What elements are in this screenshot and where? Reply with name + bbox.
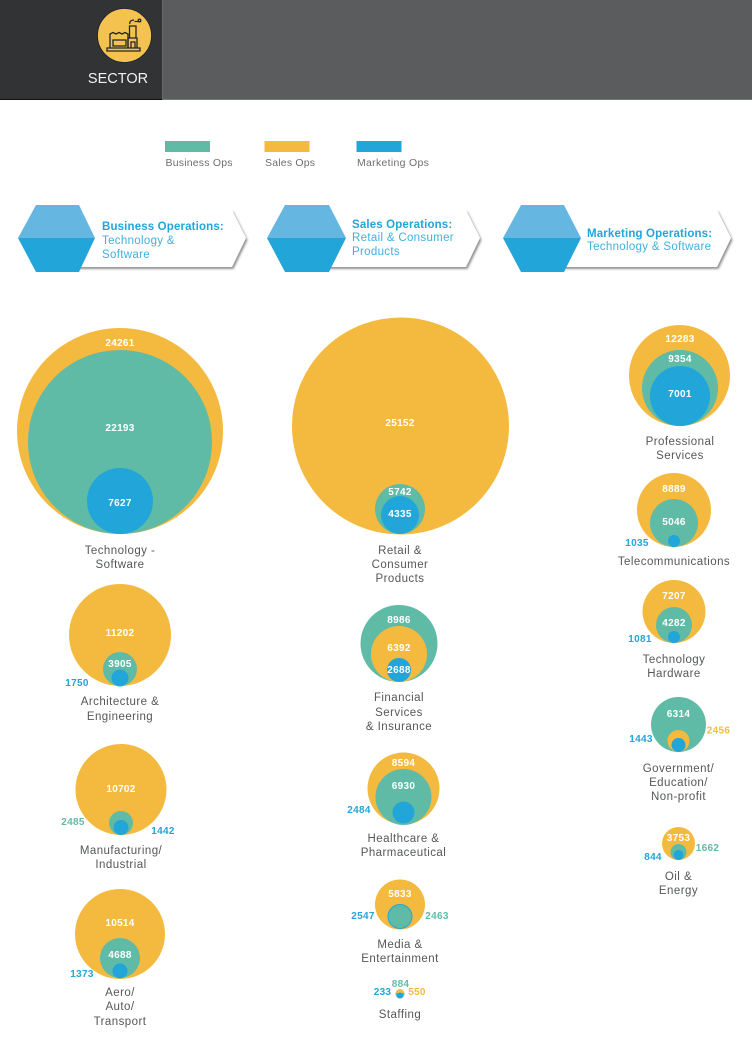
bubble: retail and consumer products [292, 318, 509, 585]
bubble: manufacturing industrial: 1442 [151, 826, 175, 837]
bubble: retail and consumer products: Retail & [378, 545, 422, 557]
banner: business operations [18, 205, 246, 272]
bubble: technology software: Software [96, 559, 144, 571]
banner: sales operations: Retail & Consumer [352, 232, 454, 244]
bubble: government education non-profit: 1443 [629, 734, 653, 745]
bubble: government education non-profit: Education/ [649, 777, 708, 789]
bubble: oil and energy: 844 [644, 852, 662, 863]
legend [165, 141, 429, 169]
bubble: professional services: 7001 [668, 389, 692, 400]
bubble: financial services and insurance: 8986 [387, 615, 411, 626]
bubble: technology software: 22193 [105, 423, 135, 434]
bubble: technology software: Technology - [85, 545, 155, 557]
bubble: aero auto transport: Aero/ [105, 987, 135, 999]
bubble: professional services: 12283 [665, 334, 695, 345]
bubble: telecommunications: Telecommunications [618, 556, 730, 568]
bubble: manufacturing industrial: 10702 [106, 784, 136, 795]
bubble: oil and energy: 3753 [667, 833, 690, 844]
banner: sales operations [267, 205, 480, 272]
bubble: healthcare and pharmaceutical: 8594 [392, 758, 415, 769]
bubble: telecommunications: 1035 [625, 538, 649, 549]
header bar [0, 0, 752, 100]
bubble: financial services and insurance: 2688 [387, 665, 411, 676]
bubble: aero auto transport: 10514 [105, 918, 135, 929]
sector label: SECTOR [88, 71, 148, 87]
bubble: architecture and engineering [65, 584, 171, 723]
bubble: government education non-profit: Non-profit [651, 791, 706, 803]
bubble: telecommunications: 5046 [662, 517, 686, 528]
banner: business operations: Business Operations: [102, 221, 224, 233]
bubble: technology hardware: 1081 [628, 634, 652, 645]
bubble: staffing: 550 [408, 987, 426, 998]
bubble: financial services and insurance: Financial [374, 692, 424, 704]
banner: marketing operations: Marketing Operations: [587, 228, 712, 240]
banner: sales operations: Products [352, 246, 400, 258]
bubble: architecture and engineering: 11202 [106, 628, 135, 639]
bubble: retail and consumer products: 25152 [385, 418, 415, 429]
bubble: technology software [17, 328, 223, 571]
bubble: media and entertainment: 2463 [425, 911, 449, 922]
bubble: government education non-profit: Government/ [643, 763, 715, 775]
bubble: architecture and engineering: 1750 [65, 678, 89, 689]
bubble: financial services and insurance: 6392 [387, 643, 411, 654]
bubble: staffing: 233 [374, 987, 391, 998]
bubble: retail and consumer products: Products [376, 573, 424, 585]
bubble: professional services: Professional [646, 436, 714, 448]
bubble: financial services and insurance: & Insurance [366, 721, 432, 733]
bubble: telecommunications [618, 473, 730, 568]
bubble: media and entertainment [351, 880, 449, 965]
bubble: media and entertainment: 5833 [388, 889, 412, 900]
bubble: manufacturing industrial: Manufacturing/ [80, 845, 163, 857]
bubble: manufacturing industrial: Industrial [95, 859, 147, 871]
bubble: technology hardware: Technology [643, 654, 705, 666]
bubble: oil and energy: 1662 [696, 843, 719, 854]
bubble: oil and energy: Oil & [665, 871, 692, 883]
bubble: technology software: 7627 [108, 498, 132, 509]
bubble: retail and consumer products: 4335 [388, 509, 412, 520]
bubble: professional services: 9354 [668, 354, 692, 365]
bubble: financial services and insurance [360, 605, 438, 733]
bubble: staffing [374, 979, 426, 1021]
legend: Business Ops [166, 157, 233, 169]
bubble: government education non-profit: 2456 [707, 726, 730, 736]
bubble: aero auto transport: 4688 [108, 950, 132, 961]
bubble: retail and consumer products: Consumer [372, 559, 428, 571]
banner: marketing operations [503, 205, 731, 272]
banner: marketing operations: Technology & Software [587, 241, 711, 253]
bubble: retail and consumer products: 5742 [388, 487, 412, 498]
banner: business operations: Technology & [102, 235, 175, 247]
bubble: manufacturing industrial: 2485 [61, 817, 85, 828]
bubble: healthcare and pharmaceutical: 6930 [392, 781, 415, 792]
bubble: aero auto transport: 1373 [70, 969, 94, 980]
banner: sales operations: Sales Operations: [352, 219, 452, 231]
bubble: oil and energy [644, 827, 719, 897]
bubble: healthcare and pharmaceutical [347, 752, 446, 859]
bubble: aero auto transport: Transport [94, 1016, 147, 1028]
bubble: media and entertainment: Entertainment [361, 953, 439, 965]
legend: Sales Ops [265, 157, 315, 169]
bubble: aero auto transport: Auto/ [105, 1001, 135, 1013]
bubble: government education non-profit: 6314 [667, 709, 690, 720]
bubble: technology hardware [628, 580, 706, 680]
bubble: technology software: 24261 [105, 338, 135, 349]
bubble: architecture and engineering: Architecture & [81, 696, 159, 708]
bubble: healthcare and pharmaceutical: Healthcare & [368, 833, 439, 845]
bubble: government education non-profit [629, 697, 730, 803]
bubble: technology hardware: 4282 [662, 618, 686, 629]
banner: business operations: Software [102, 249, 150, 261]
bubble: aero auto transport [70, 889, 165, 1028]
bubble: architecture and engineering: 3905 [108, 659, 132, 670]
bubble: oil and energy: Energy [659, 885, 698, 897]
bubble: healthcare and pharmaceutical: Pharmaceutical [361, 847, 446, 859]
bubble: healthcare and pharmaceutical: 2484 [347, 805, 371, 816]
bubble: professional services: Services [656, 450, 704, 462]
bubble: staffing: Staffing [379, 1009, 421, 1021]
icon: factory [98, 8, 152, 62]
bubble: technology hardware: 7207 [662, 591, 686, 602]
legend: Marketing Ops [357, 157, 429, 169]
bubble: technology hardware: Hardware [647, 668, 701, 680]
bubble: financial services and insurance: Services [375, 707, 423, 719]
bubble: professional services [629, 325, 730, 462]
bubble: telecommunications: 8889 [662, 484, 686, 495]
bubble: media and entertainment: Media & [377, 939, 423, 951]
bubble: staffing: 884 [392, 979, 409, 990]
bubble: manufacturing industrial [61, 744, 175, 871]
bubble: architecture and engineering: Engineering [87, 711, 153, 723]
bubble: media and entertainment: 2547 [351, 911, 375, 922]
